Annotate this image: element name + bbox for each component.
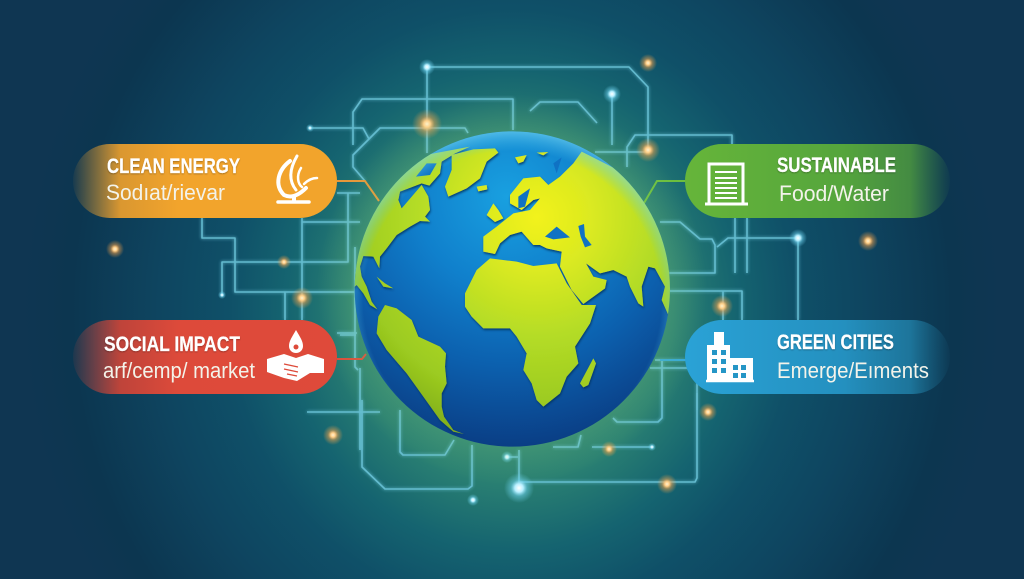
- connector: green cities: [660, 359, 686, 361]
- panel: green cities: [685, 320, 950, 394]
- heading: SUSTAINABLE: [777, 154, 896, 177]
- subtext: arf/cemp/ market: [103, 358, 255, 383]
- pill background: [685, 144, 950, 218]
- pill background: [73, 144, 337, 218]
- globe: [340, 131, 683, 447]
- connector: clean energy: [337, 181, 379, 201]
- pill background: [73, 320, 337, 394]
- icon: document: [705, 164, 748, 204]
- icon: buildings: [706, 332, 754, 381]
- continents: [340, 147, 683, 434]
- inland seas: [416, 157, 592, 247]
- circuit network lines: [202, 67, 798, 489]
- glowing nodes: [106, 54, 878, 506]
- icon: flame swirl: [278, 156, 317, 202]
- pill background: [685, 320, 950, 394]
- connector: sustainable: [644, 181, 686, 203]
- panel: clean energy: [73, 144, 337, 218]
- connector: social impact: [337, 354, 366, 359]
- subtext: Emerge/Eıments: [777, 358, 929, 383]
- heading: CLEAN ENERGY: [107, 155, 240, 178]
- ocean sphere: [355, 131, 670, 447]
- panel: sustainable: [685, 144, 950, 218]
- heading: SOCIAL IMPACT: [104, 333, 240, 356]
- rim light: [355, 131, 670, 447]
- globe glow: [317, 94, 707, 484]
- heading: GREEN CITIES: [777, 331, 894, 354]
- panel: social impact: [73, 320, 337, 394]
- subtext: Sodıat/rievar: [106, 180, 225, 205]
- icon: hands and drop: [267, 330, 324, 381]
- subtext: Food/Water: [779, 181, 889, 206]
